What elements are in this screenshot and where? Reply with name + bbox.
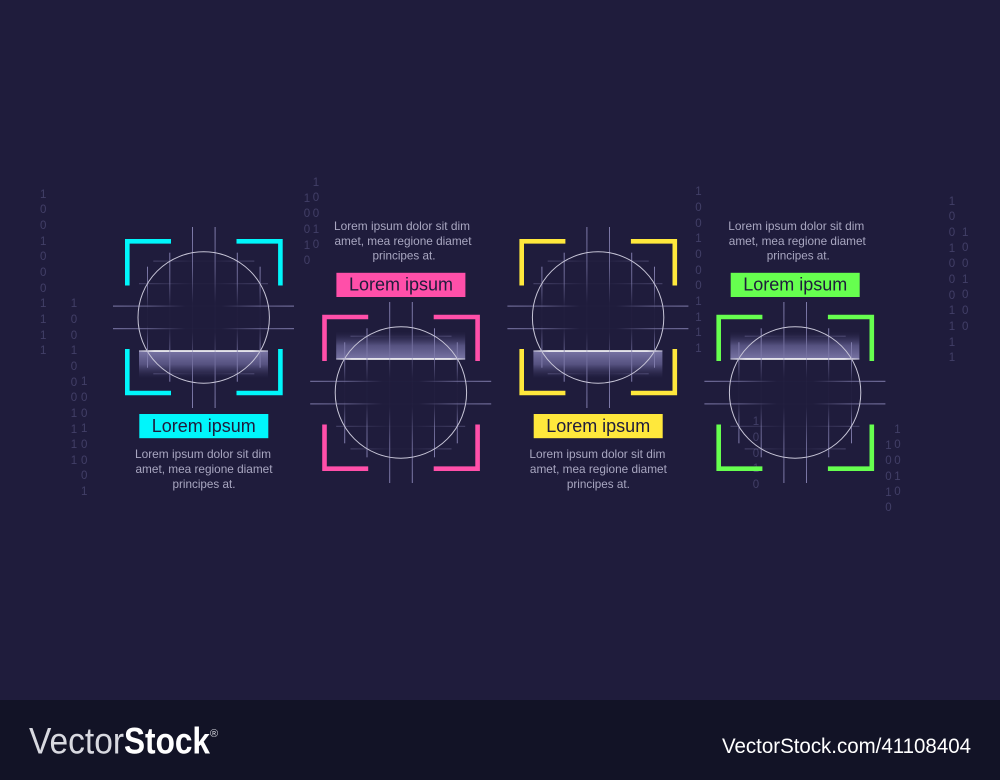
binary digit columns: 0 <box>71 361 77 373</box>
text block: green description: amet, mea regione diamet <box>729 234 866 248</box>
binary digit columns: 0 <box>894 486 901 498</box>
logo: VectorStock <box>29 720 218 762</box>
panel: green scanner <box>704 219 885 483</box>
text block: yellow description: Lorem ipsum dolor sit dim <box>529 447 665 461</box>
binary digit columns: 1 <box>71 455 77 467</box>
label: cyan heading: Lorem ipsum <box>152 416 256 436</box>
binary digit columns: 0 <box>949 274 955 286</box>
panel: cyan scanner <box>113 227 294 491</box>
binary digit columns: 0 <box>962 305 968 317</box>
binary digit columns: 0 <box>71 392 77 404</box>
binary digit columns: 0 <box>40 251 46 263</box>
label: green heading: Lorem ipsum <box>743 275 847 295</box>
binary digit columns: 0 <box>949 227 955 239</box>
binary digit columns: 1 <box>753 416 759 428</box>
footer id text: VectorStock.com/41108404 <box>722 735 971 758</box>
binary digit columns: 1 <box>753 463 759 475</box>
binary digit columns: 0 <box>313 239 319 251</box>
binary digit columns: 1 <box>81 423 87 435</box>
text block: cyan description: principes at. <box>172 477 236 491</box>
binary digit columns: 0 <box>81 455 87 467</box>
binary digit columns: 0 <box>695 265 702 277</box>
binary digit columns: 1 <box>695 186 702 198</box>
binary digit columns: 1 <box>71 345 77 357</box>
text block: cyan description: amet, mea regione diamet <box>136 462 273 476</box>
binary digit columns: 1 <box>885 487 892 499</box>
binary digit columns: 1 <box>885 440 892 452</box>
text block: green description: principes at. <box>767 248 830 262</box>
binary digit columns: 1 <box>40 345 46 357</box>
text block: yellow description: amet, mea regione diamet <box>530 462 668 476</box>
binary digit columns: 0 <box>81 408 87 420</box>
binary digit columns: 1 <box>71 439 77 451</box>
binary digit columns: 0 <box>695 202 702 214</box>
label: pink heading <box>336 273 465 297</box>
binary digit columns: 0 <box>885 471 892 483</box>
binary digit columns: 0 <box>40 267 46 279</box>
binary digit columns: 0 <box>695 218 702 230</box>
panel: pink scanner <box>310 219 491 483</box>
binary digit columns: 1 <box>949 352 955 364</box>
binary digit columns: 1 <box>81 486 87 498</box>
binary digit columns: 0 <box>885 455 892 467</box>
binary digit columns: 0 <box>962 321 968 333</box>
binary digit columns: 0 <box>753 448 759 460</box>
label: green heading <box>731 273 860 297</box>
label: yellow heading: Lorem ipsum <box>546 416 650 436</box>
binary digit columns: 0 <box>962 242 968 254</box>
binary digit columns: 1 <box>894 424 901 436</box>
binary digit columns: 1 <box>695 296 702 308</box>
binary digit columns: 1 <box>40 236 46 248</box>
binary digit columns: 0 <box>71 377 77 389</box>
label: cyan heading <box>139 414 268 438</box>
binary digit columns: 1 <box>695 327 702 339</box>
binary digit columns: 0 <box>962 258 968 270</box>
binary digit columns: 1 <box>304 240 310 252</box>
binary digit columns: 1 <box>40 298 46 310</box>
binary digit columns: 1 <box>40 189 46 201</box>
binary digit columns: 1 <box>949 337 955 349</box>
icon: cyan scanner frame <box>113 227 294 408</box>
binary digit columns: 0 <box>40 220 46 232</box>
binary digit columns: 1 <box>81 376 87 388</box>
binary digit columns: 1 <box>40 314 46 326</box>
binary digit columns: 0 <box>753 432 759 444</box>
label: yellow heading <box>534 414 663 438</box>
binary digit columns: 0 <box>40 283 46 295</box>
logo: VectorStock: ® <box>210 728 218 740</box>
binary digit columns: 0 <box>81 439 87 451</box>
binary digit columns: 1 <box>304 192 310 204</box>
binary digit columns: 1 <box>949 196 955 208</box>
text block: cyan description <box>135 447 273 491</box>
binary digit columns: 0 <box>894 455 901 467</box>
binary digit columns: 0 <box>949 258 955 270</box>
binary digit columns: 1 <box>949 321 955 333</box>
binary digit columns: 0 <box>962 289 968 301</box>
binary digit columns: 1 <box>695 233 702 245</box>
panel: yellow scanner <box>507 227 688 491</box>
label: pink heading: Lorem ipsum <box>349 275 453 295</box>
binary digit columns: 0 <box>695 249 702 261</box>
icon: yellow scanner frame <box>507 227 688 408</box>
binary digit columns: 1 <box>71 408 77 420</box>
binary digit columns: 0 <box>81 470 87 482</box>
text block: pink description: amet, mea regione diamet <box>334 234 472 248</box>
binary digit columns: 0 <box>313 208 319 220</box>
binary digit columns: 0 <box>304 255 310 267</box>
binary digit columns: 1 <box>313 224 319 236</box>
binary digit columns: 0 <box>313 192 319 204</box>
binary digit columns: 0 <box>894 439 901 451</box>
binary digit columns: 1 <box>40 330 46 342</box>
binary digit columns: 1 <box>962 274 968 286</box>
logo: VectorStock: Stock <box>124 720 210 762</box>
binary digit columns: 0 <box>304 224 310 236</box>
binary digit columns: 1 <box>695 312 702 324</box>
text block: pink description <box>334 219 472 262</box>
icon: green scanner frame <box>704 302 885 483</box>
binary digit columns: 0 <box>885 502 892 514</box>
binary digit columns: 0 <box>949 211 955 223</box>
text block: pink description: principes at. <box>372 248 436 262</box>
binary digit columns: 0 <box>949 290 955 302</box>
text block: yellow description <box>529 447 668 491</box>
binary digit columns: 1 <box>313 176 319 188</box>
binary digit columns: 1 <box>894 471 901 483</box>
binary digit columns: 1 <box>949 305 955 317</box>
binary digit columns <box>40 176 968 514</box>
binary digit columns: 0 <box>753 479 759 491</box>
logo: VectorStock: Vector <box>29 720 124 762</box>
footer bar <box>0 700 1000 780</box>
text block: pink description: Lorem ipsum dolor sit dim <box>334 219 470 233</box>
binary digit columns: 0 <box>304 208 310 220</box>
icon: pink scanner frame <box>310 302 491 483</box>
binary digit columns: 0 <box>71 330 77 342</box>
binary digit columns: 0 <box>40 204 46 216</box>
text block: yellow description: principes at. <box>567 477 630 491</box>
binary digit columns: 1 <box>962 226 968 238</box>
binary digit columns: 1 <box>71 298 77 310</box>
binary digit columns: 0 <box>695 280 702 292</box>
text block: cyan description: Lorem ipsum dolor sit dim <box>135 447 271 461</box>
binary digit columns: 0 <box>81 392 87 404</box>
binary digit columns: 1 <box>695 343 702 355</box>
binary digit columns: 1 <box>71 424 77 436</box>
binary digit columns: 1 <box>949 243 955 255</box>
text block: green description: Lorem ipsum dolor sit dim <box>728 219 864 233</box>
binary digit columns: 0 <box>71 314 77 326</box>
text block: green description <box>728 219 866 262</box>
